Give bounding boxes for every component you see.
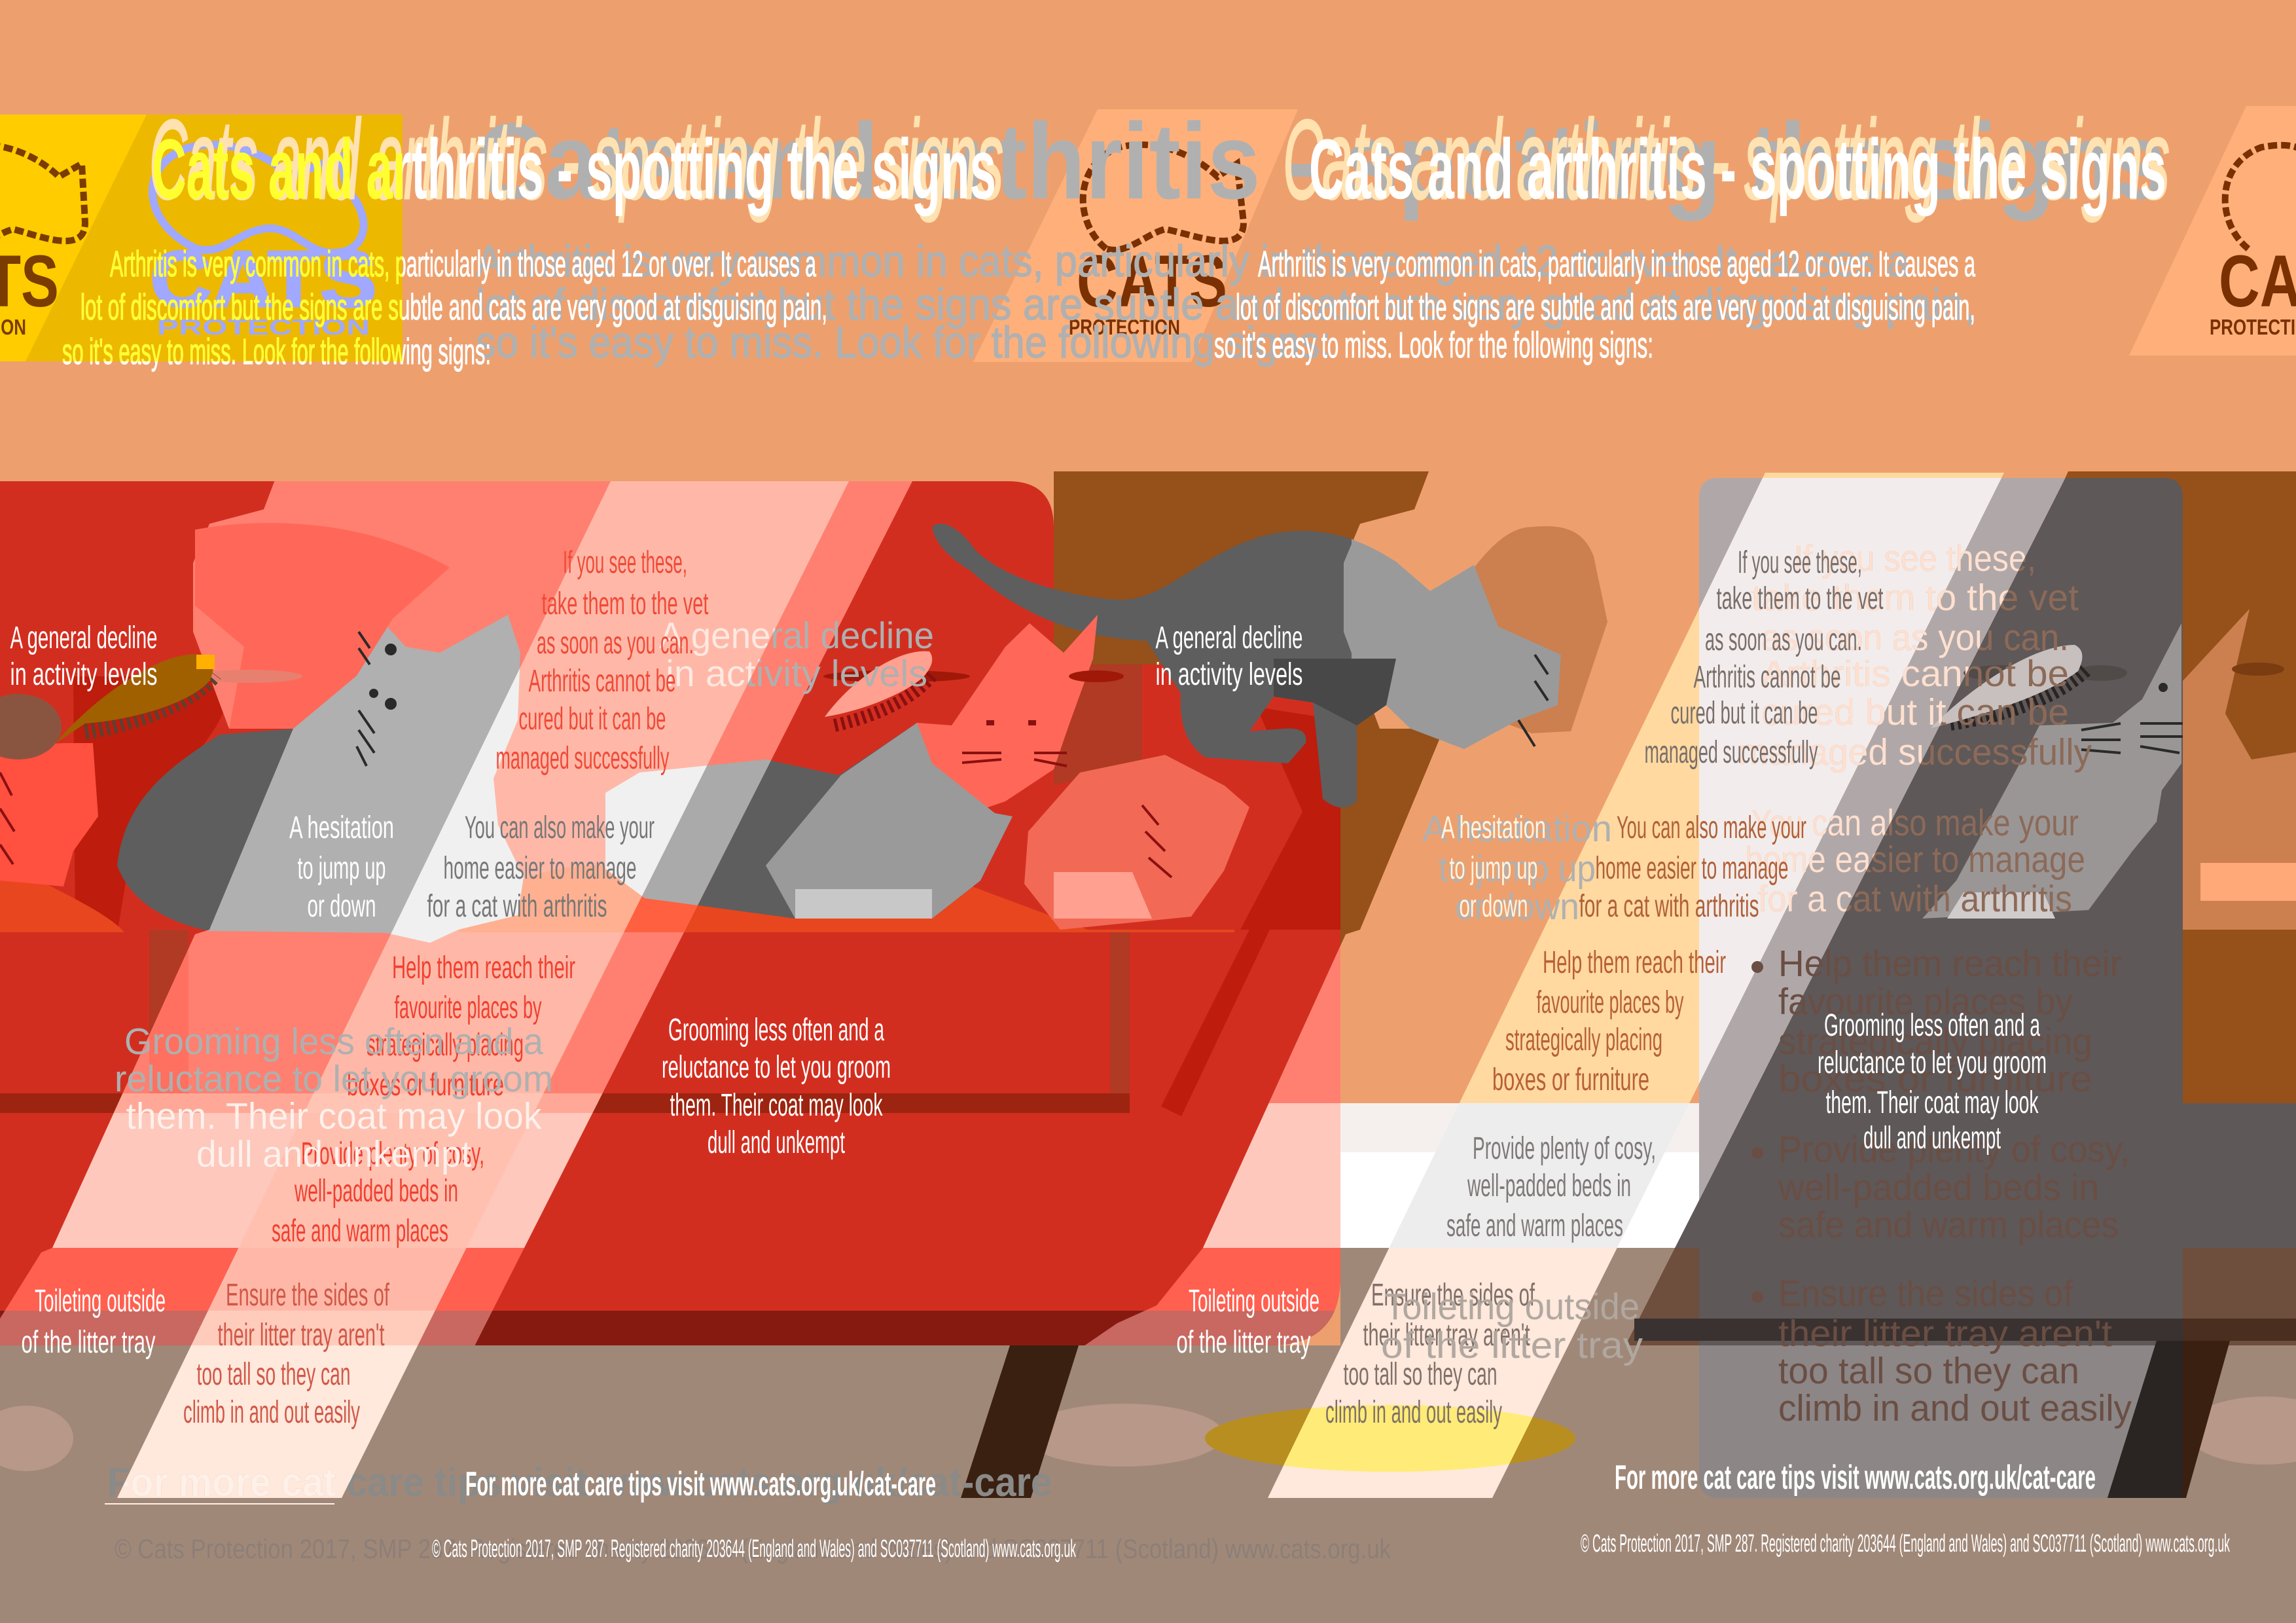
skirting board [1340,1103,2296,1248]
tip list, condensed right, help [1492,945,1726,1097]
advice: make home easier, bright within band [1748,809,1892,911]
advice: make home easier, bright within band: for a cat with arthritis [1758,878,2072,920]
intro paragraph, yellow over logo: lot of discomfort but the signs are subtle and cats are very good at disguising pain, [81,286,827,327]
intro paragraph, condensed white layer left: so it's easy to miss. Look for the following signs: [62,331,491,372]
advice: see the vet, bright within band: If you see these, [1794,538,2036,579]
grey cat chin in panel [1947,892,2055,919]
sign: grooming, condensed right [1818,1008,2047,1156]
advice: see the vet, condensed left: cured but it can be [518,702,666,737]
sign: general decline, wide grey [659,615,934,695]
sign: general decline, condensed left [10,621,157,692]
tip list, condensed right, litter tray: climb in and out easily [1325,1395,1502,1430]
sign: toileting, wide grey: Toileting outside [1384,1286,1640,1328]
tip list, condensed left, beds: well-padded beds in [294,1174,458,1209]
logo: Cats Protection, periwinkle [150,145,377,339]
intro paragraph, condensed white layer left: Arthritis is very common in cats, particularly in those aged 12 or over. It causes a [110,243,816,284]
tip list, condensed right, help: favourite places by [1537,985,1683,1020]
salmon cat chin [1054,872,1152,919]
sign: general decline, bright within band [659,623,776,686]
tip list, condensed right, litter tray: too tall so they can [1343,1357,1498,1392]
advice: see the vet, condensed left: as soon as you can. [537,626,694,661]
intro paragraph, yellow over logo [63,249,403,361]
sign: general decline, condensed right [1156,621,1302,692]
advice: see the vet, condensed left: Arthritis cannot be [529,664,675,699]
web link, bright within band: For more cat care tips visit www.cats.org.uk/cat-care [107,1460,1052,1505]
lying cat two [117,615,524,943]
logo: Cats Protection, brown centre [1069,145,1244,339]
sign: hesitation, wide grey: or down [1455,886,1579,928]
advice: see the vet, bright within band: take them to the vet [1751,577,2079,619]
salmon cat silhouette, top left [195,523,450,729]
sign: grooming, condensed left [662,1013,891,1160]
horizontal sofa seams behind the cats [195,663,2284,683]
sofa [0,481,1340,1345]
tip list, wide, dark brown in panel: well-padded beds in [1778,1167,2099,1209]
brush two [825,651,933,725]
sign: grooming, bright within band: them. Their coat may look [126,1095,542,1137]
tip list, condensed right, help: boxes or furniture [1492,1063,1649,1097]
orange cat at right edge [2183,609,2296,930]
sign: general decline, wide grey: A general decline [659,615,934,657]
intro paragraph, wide grey layer [476,236,1975,367]
web link, condensed left: For more cat care tips visit www.cats.org.uk/cat-care [465,1465,936,1503]
advice: see the vet, wide peach: as soon as you can. [1761,617,2069,659]
sign: general decline, bright within band: in activity levels [666,653,927,695]
sign: hesitation, condensed right: to jump up [1449,851,1538,886]
brush one [56,654,215,743]
tip list, condensed right, litter tray: Ensure the sides of [1371,1278,1535,1313]
advice: see the vet, condensed right: as soon as you can. [1705,623,1862,657]
sign: grooming, condensed left: Grooming less often and a [668,1013,884,1048]
sign: grooming, condensed left: reluctance to let you groom [662,1050,891,1085]
tip list, condensed left, help [347,951,575,1103]
tip list, wide, dark brown in panel: Provide plenty of cosy, [1778,1129,2130,1171]
logo background, right [2129,106,2296,356]
advice: see the vet, bright within band: Arthritis cannot be [1761,653,2069,695]
link underline [105,1503,334,1504]
sign: hesitation, wide grey [1422,808,1612,928]
walking cat chest shade [1274,659,1396,725]
advice: see the vet, condensed left: If you see these, [563,545,687,580]
advice: see the vet, condensed right: If you see these, [1738,545,1862,580]
tip list, condensed left, help: boxes or furniture [347,1068,504,1103]
tip list, wide, dark brown in panel: their litter tray aren't [1778,1313,2112,1355]
intro paragraph, wide grey layer: so it's easy to miss. Look for the following signs: [476,318,1331,367]
intro paragraph, condensed white layer right: so it's easy to miss. Look for the following signs: [1214,324,1653,365]
sign: general decline, bright within band: A general decline [659,615,934,657]
right edge base strips [1634,1248,2296,1345]
intro paragraph, wide grey layer: Arthritis is very common in cats, particularly in those aged 12 or over. It causes a [476,236,1909,286]
floor [0,1248,2296,1623]
panel [1699,478,2183,1345]
advice: make home easier, wide peach: for a cat with arthritis [1758,878,2072,920]
tip list, condensed right, beds: safe and warm places [1446,1209,1623,1243]
sign: toileting, wide grey [1381,1286,1643,1366]
sign: hesitation, wide grey: A hesitation [1422,808,1612,850]
advice: make home easier, wide peach: home easier to manage [1745,839,2085,881]
advice: see the vet, wide peach [1738,538,2092,773]
tip list, wide, dark brown in panel: favourite places by [1778,981,2073,1023]
lying cat one chin [795,889,932,919]
sign: grooming, bright within band: dull and unkempt [196,1133,471,1175]
tip list, condensed left, litter tray: Ensure the sides of [226,1278,389,1313]
advice: make home easier, wide peach: You can also make your [1751,802,2079,844]
logo: Cats Protection, brown centre: PROTECTION [1069,315,1180,339]
sign: grooming, condensed left: dull and unkempt [708,1125,845,1160]
advice: make home easier, condensed left: for a cat with arthritis [427,889,607,924]
sofa legs [961,1341,2230,1498]
brush three [1931,645,2088,728]
advice: see the vet, bright within band [1741,544,2025,773]
tip list, wide, dark brown in panel: climb in and out easily [1778,1387,2132,1429]
intro paragraph, condensed white layer left [62,243,827,372]
sign: grooming, condensed right: them. Their coat may look [1826,1085,2039,1120]
sign: toileting, condensed left [21,1284,166,1360]
walking cat [932,524,1561,808]
wall [1054,471,2296,1103]
sign: hesitation, wide grey: to jump up [1439,848,1596,890]
text: Cats and arthritis - spotting the signs [149,97,1003,223]
grey cat in panel [1922,623,2181,919]
food bowl [1205,1405,1575,1472]
panel lower part [1699,1345,2183,1498]
tip list, condensed left, help: favourite places by [394,991,542,1025]
tip list, condensed right, beds: Provide plenty of cosy, [1473,1131,1656,1166]
tip list, wide, dark brown in panel: safe and warm places [1778,1204,2119,1246]
tip list, condensed left, help: Help them reach their [392,951,575,985]
sign: grooming, wide grey: Grooming less often and a [124,1021,543,1063]
advice: make home easier, bright within band: home easier to manage [1745,839,2085,881]
advice: make home easier, condensed right: for a cat with arthritis [1579,889,1759,924]
sign: grooming, wide grey: reluctance to let you groom [115,1058,553,1100]
cat faces: eyes and whiskers [0,632,2183,877]
advice: make home easier, condensed right: home easier to manage [1596,851,1788,886]
advice: make home easier, condensed right: You can also make your [1617,811,1806,845]
sign: grooming, condensed right: Grooming less often and a [1824,1008,2040,1043]
sign: grooming, condensed right: dull and unkempt [1863,1121,2001,1156]
tip list, condensed right, litter tray: their litter tray aren't [1363,1318,1530,1353]
outer diagonal band: lightened copy of the scene [0,471,2068,1345]
sign: hesitation, condensed left: or down [308,889,376,924]
advice: make home easier, condensed left: home easier to manage [444,851,636,886]
sign: hesitation, condensed right: or down [1460,889,1528,924]
sign: grooming, condensed left: them. Their coat may look [670,1088,883,1123]
sign: grooming, wide grey: them. Their coat may look [126,1095,542,1137]
intro paragraph, yellow over logo: so it's easy to miss. Look for the following signs: [62,331,491,372]
sign: grooming, condensed right: reluctance to let you groom [1818,1046,2047,1080]
sign: toileting, wide grey: of the litter tray [1381,1324,1643,1366]
lying cat one [605,723,1013,919]
tip list, condensed right, help: strategically placing [1505,1023,1662,1057]
logo background, centre [973,109,1298,362]
seat cushion [0,866,1234,932]
advice: make home easier, condensed left: You can also make your [465,811,655,845]
advice: make home easier, condensed left [427,811,655,924]
logo: Cats Protection, periwinkle: PROTECTION [157,315,370,339]
footer, wide grey: © Cats Protection 2017, SMP 287. Registered charity 203644 (England and Wales) and SC037711 (Scotland) www.cats.org.uk [115,1533,1391,1564]
sign: grooming, bright within band [126,1095,542,1175]
sign: hesitation, condensed left: A hesitation [289,811,394,845]
advice: see the vet, wide peach: Arthritis cannot be [1761,653,2069,695]
tip list, condensed left, litter tray: their litter tray aren't [217,1318,385,1353]
advice: see the vet, wide peach: If you see these, [1794,538,2036,579]
tip list, wide, dark brown in panel: too tall so they can [1778,1350,2079,1392]
title, condensed white layer left: Cats and arthritis - spotting the signs [152,121,996,217]
advice: see the vet, bright within band: as soon as you can. [1761,617,2069,659]
tip list, condensed left, litter tray: climb in and out easily [183,1395,360,1430]
tip list, wide, dark brown in panel: Help them reach their [1778,943,2122,985]
advice: see the vet, bright within band: cured but it can be [1761,691,2069,733]
advice: see the vet, condensed left: managed successfully [496,741,669,776]
orange cat chin [2200,863,2296,901]
logo: Cats Protection, periwinkle: CATS [150,234,377,323]
text: © Cats Protection 2017, SMP 287. Registered charity 203644 (England and Wales) and SC037711 (Scotland) www.cats.org.uk [432,1535,1076,1563]
sign: toileting, condensed left: of the litter tray [21,1325,155,1360]
sign: general decline, condensed left: in activity levels [10,657,157,692]
tip list, condensed left, beds: Provide plenty of cosy, [301,1137,484,1171]
advice: make home easier, bright within band: You can also make your [1751,802,2079,844]
sign: hesitation, condensed right [1441,811,1546,924]
grey head of lying cat one [766,723,1013,919]
sign: toileting, condensed right: Toileting outside [1189,1284,1319,1319]
sign: hesitation, condensed right: A hesitation [1441,811,1546,845]
intro paragraph, condensed white layer right [1214,243,1975,365]
salmon cat, centre right [1024,755,1249,930]
intro paragraph, wide grey layer: lot of discomfort but the signs are subtle and cats are very good at disguising pain, [476,280,1975,329]
advice: see the vet, wide peach: take them to the vet [1751,577,2079,619]
intro paragraph, condensed white layer left: lot of discomfort but the signs are subtle and cats are very good at disguising pain, [81,286,827,327]
intro paragraph, yellow over logo: Arthritis is very common in cats, particularly in those aged 12 or over. It causes a [110,243,816,284]
walking cat head in front of the orange cat [1352,539,1561,749]
sign: toileting, condensed right [1177,1284,1319,1360]
advice: see the vet, condensed left [496,545,708,776]
logo panel, left [0,115,403,361]
advice: see the vet, wide peach: cured but it can be [1761,691,2069,733]
tip list, condensed left, help: strategically placing [367,1028,524,1063]
hand holding brush [0,694,62,759]
salmon cat, left edge [0,743,98,886]
advice: make home easier, condensed right [1579,811,1806,924]
sign: hesitation, condensed left [289,811,394,924]
advice: make home easier, wide peach [1745,802,2085,920]
sign: grooming, wide grey: dull and unkempt [196,1133,471,1175]
tip list, wide, dark brown in panel: boxes or furniture [1778,1058,2092,1100]
tip list, condensed left, beds: safe and warm places [272,1214,448,1249]
logo: Cats Protection, brown cropped at left [0,145,85,339]
salmon cat head, centre [917,615,1098,816]
sofa seat frame [0,930,1130,1113]
advice: see the vet, condensed right [1644,545,1884,770]
advice: see the vet, bright within band: managed successfully [1738,731,2092,773]
sign: hesitation, condensed left: to jump up [297,851,386,886]
inner diagonal band: brightest copy of the scene [117,473,2004,1498]
tip list, condensed right, help: Help them reach their [1543,945,1726,980]
advice: see the vet, condensed right: Arthritis cannot be [1694,660,1840,695]
advice: see the vet, condensed right: managed successfully [1644,735,1818,770]
tip list, wide, dark brown in panel [1751,943,2132,1429]
sofa arm shade [1054,665,1142,786]
sofa shadows [73,676,223,926]
sign: grooming, wide grey [115,1021,553,1175]
sign: general decline, condensed right: in activity levels [1156,657,1302,692]
sign: toileting, condensed right: of the litter tray [1177,1325,1310,1360]
tip list, condensed left, beds [272,1137,484,1249]
advice: see the vet, condensed right: cured but it can be [1670,696,1818,731]
sign: general decline, wide grey: in activity levels [666,653,927,695]
tip list, condensed left, litter tray: too tall so they can [196,1357,351,1392]
advice: see the vet, condensed right: take them to the vet [1716,581,1884,616]
sign: general decline, condensed left: A general decline [10,621,157,655]
tip list, condensed right, litter tray [1325,1278,1535,1430]
advice: see the vet, wide peach: managed successfully [1738,731,2092,773]
tip list, wide, dark brown in panel: strategically placing [1778,1021,2092,1063]
web link, wide grey: For more cat care tips visit www.cats.org.uk/cat-care [107,1460,1052,1505]
floor shadows [0,1396,2296,1471]
logo: Cats Protection, brown right [2210,145,2296,339]
sign: general decline, condensed right: A general decline [1156,621,1302,655]
scene: sofa, wall, panel and cats, base colours [0,471,2296,1623]
tip list, wide, dark brown in panel: Ensure the sides of [1778,1273,2073,1315]
logo: Cats Protection, brown centre: CATS [1077,240,1227,322]
title, yellow over logo: Cats and arthritis - spotting the signs [152,121,996,217]
tip list, condensed left, litter tray [183,1278,389,1430]
advice: see the vet, condensed left: take them to the vet [542,587,708,621]
tip list, condensed right, beds: well-padded beds in [1467,1169,1631,1203]
sign: toileting, condensed left: Toileting outside [35,1284,166,1319]
tip list, condensed right, beds [1446,1131,1656,1243]
orange cat silhouette on wall [1473,526,1607,733]
